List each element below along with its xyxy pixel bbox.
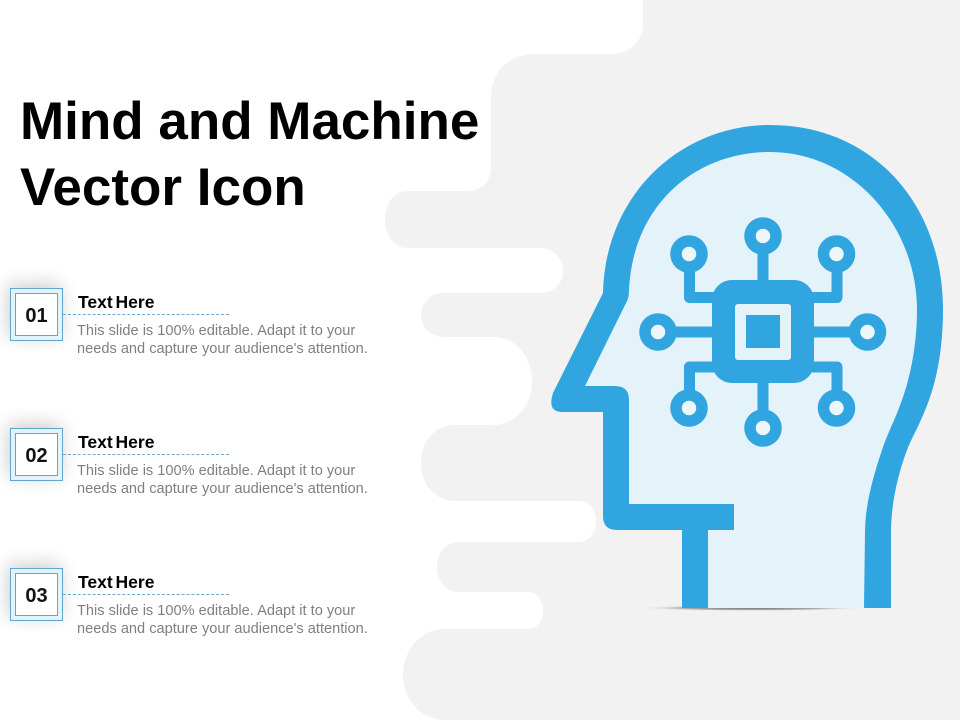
icon: head with circuit [551,125,943,611]
circuit nodes [645,223,880,441]
chip body [712,280,814,383]
item text 01: This slide is 100% editable. Adapt it to your [77,323,355,339]
list item 01 [0,276,368,357]
chip core [746,315,780,348]
item text 01: needs and capture your audience's attention. [77,341,368,357]
title [20,92,479,216]
number badge 02: 02 [25,445,48,467]
number badge 01: 01 [25,305,48,327]
chip inner frame [735,304,791,360]
item text 03: needs and capture your audience's attention. [77,621,368,637]
item heading 02: Text Here [78,432,154,452]
item text 01 [77,323,368,357]
head outline [551,125,943,608]
title: Mind and Machine [20,92,479,151]
item text 03 [77,603,368,637]
item text 02: This slide is 100% editable. Adapt it to your [77,463,355,479]
icon: circuit chip [645,223,880,441]
connectors [658,236,867,428]
list item 03 [0,556,368,637]
list item 02 [0,416,368,497]
number badge 03 [10,568,63,621]
item text 02 [77,463,368,497]
number badge 02 [10,428,63,481]
item text 02: needs and capture your audience's attention. [77,481,368,497]
head interior [585,152,917,608]
ground shadow [638,605,866,611]
number badge 01 [10,288,63,341]
title: Vector Icon [20,158,306,216]
item text 03: This slide is 100% editable. Adapt it to your [77,603,355,619]
number badge 03: 03 [25,585,48,607]
item heading 03: Text Here [78,572,154,592]
item heading 01: Text Here [78,292,154,312]
